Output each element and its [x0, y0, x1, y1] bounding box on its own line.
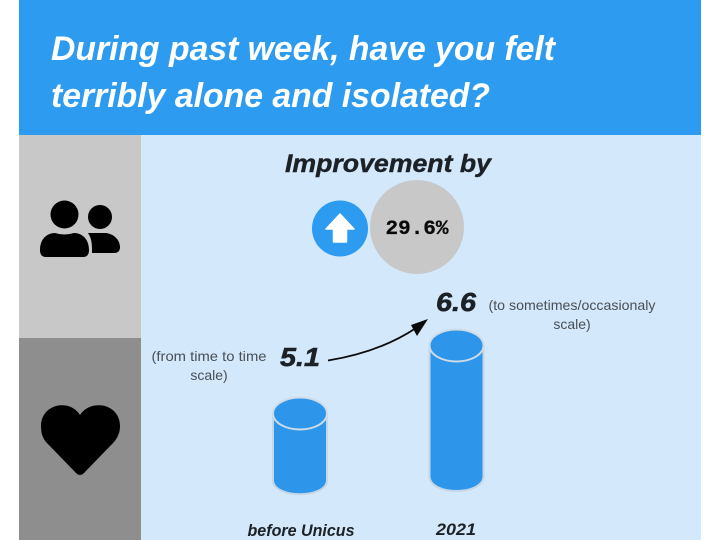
panel: social sidebar — [19, 135, 141, 338]
icon: people — [40, 200, 120, 257]
percentage badge — [370, 180, 464, 274]
note: from scale: (from time to time — [152, 348, 267, 364]
note: to scale: scale) — [553, 316, 591, 332]
label: 2021: 2021 — [435, 520, 476, 539]
percentage badge: 29.6% — [386, 218, 450, 241]
heading: improvement: Improvement by — [285, 150, 492, 178]
bar: before Unicus cylinder — [273, 398, 327, 494]
icon: up arrow badge — [312, 200, 368, 256]
note: from scale: scale) — [190, 367, 228, 383]
title — [51, 30, 557, 115]
header banner — [19, 0, 701, 135]
title: During past week, have you felt — [51, 30, 557, 68]
value: 6.6: 6.6 — [436, 287, 477, 317]
note: to scale: (to sometimes/occasionaly — [488, 297, 656, 313]
bar: 2021 cylinder — [430, 330, 484, 491]
arrow: 5.1 to 6.6 — [328, 319, 428, 360]
panel: health sidebar — [19, 338, 141, 540]
note: from scale — [152, 348, 267, 383]
icon: heart — [41, 405, 120, 475]
title: terribly alone and isolated? — [51, 77, 490, 115]
label: before Unicus: before Unicus — [248, 521, 354, 540]
panel: main light blue background — [141, 135, 701, 540]
note: to scale — [488, 297, 656, 332]
value: 5.1: 5.1 — [280, 342, 320, 372]
